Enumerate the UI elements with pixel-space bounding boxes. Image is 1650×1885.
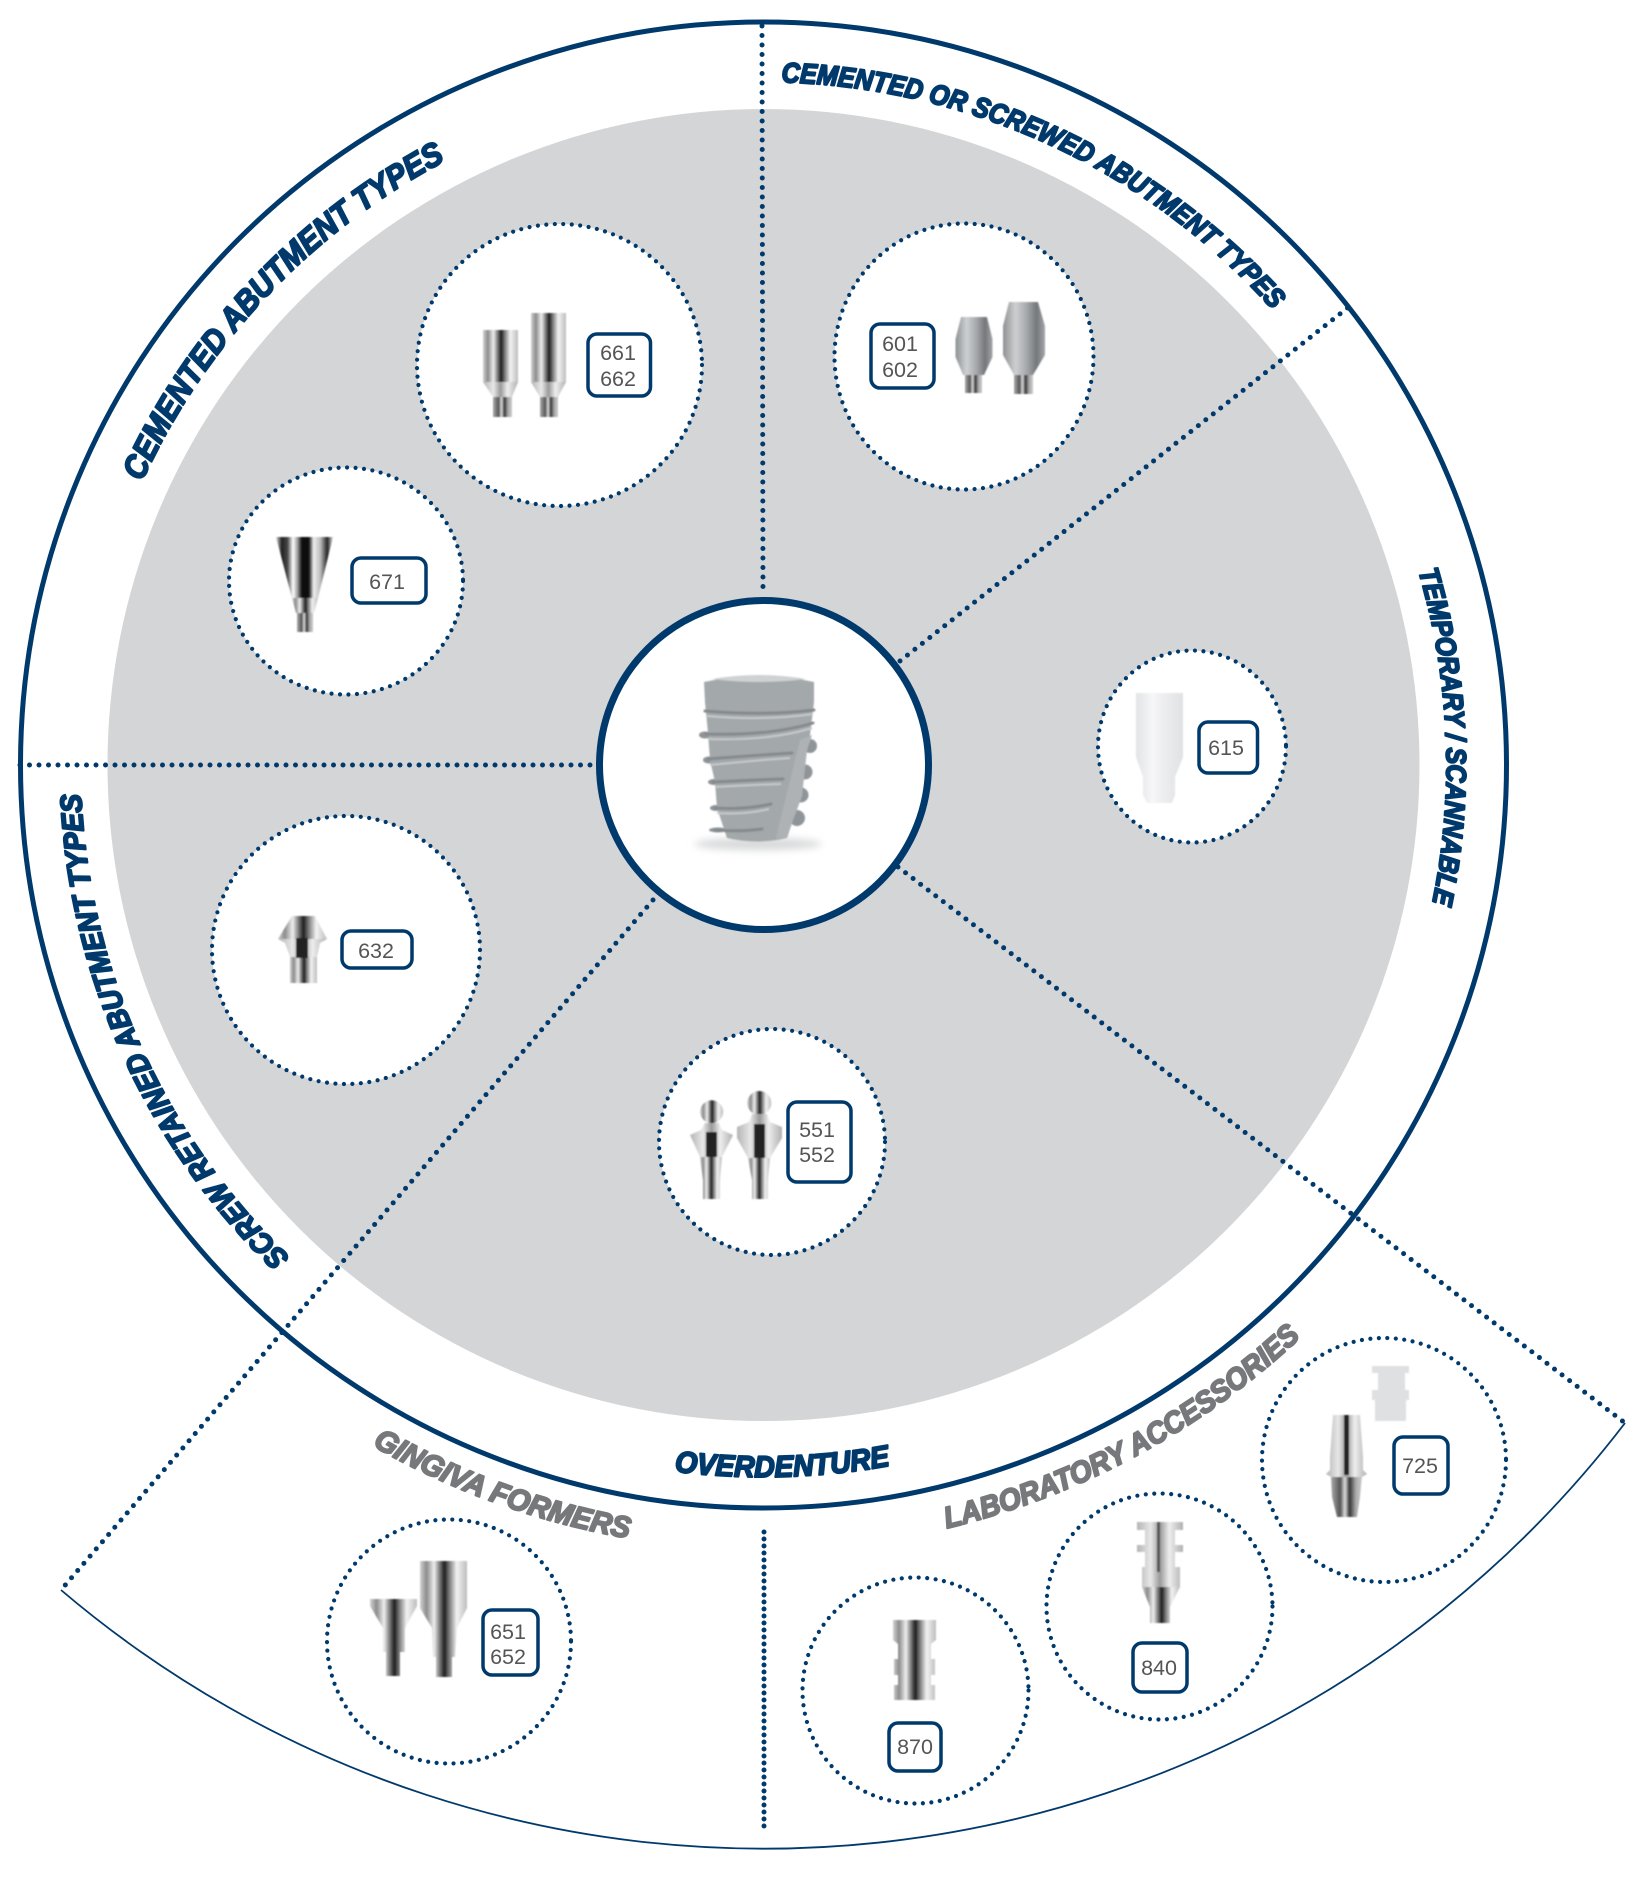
icon: abutment 661: [483, 330, 518, 417]
heading: temporary / scannable: TEMPORARY / SCANNABLE: [1418, 567, 1468, 909]
icon: plastic cap 725: [1372, 1366, 1409, 1421]
panel: 840: [1046, 1494, 1272, 1720]
icon: ball abutment 552: [737, 1091, 782, 1199]
icon: gingiva former 652: [420, 1561, 467, 1677]
heading: gingiva formers: GINGIVA FORMERS: [375, 1431, 632, 1538]
icon: ball abutment 551: [690, 1100, 733, 1199]
heading: screw retained abutment types: SCREW RETAINED ABUTMENT TYPES: [60, 794, 288, 1268]
icon: transfer 840: [1137, 1522, 1183, 1623]
code 652: 652: [490, 1645, 526, 1669]
panel: 601 / 602: [834, 224, 1094, 490]
icon: temporary abutment 615: [1136, 693, 1183, 803]
panel: 661 / 662: [417, 224, 702, 506]
heading: laboratory accessories: LABORATORY ACCESSORIES: [944, 1324, 1298, 1530]
code 870: 870: [897, 1735, 933, 1759]
code 632: 632: [358, 939, 394, 963]
panel: 725: [1262, 1338, 1506, 1582]
code 602: 602: [882, 358, 918, 382]
panel: 615: [1098, 650, 1286, 842]
icon: abutment 662: [531, 313, 566, 417]
panel: 870: [802, 1578, 1028, 1804]
label box: [889, 1723, 941, 1771]
heading: cemented or screwed abutment types: CEMENTED OR SCREWED ABUTMENT TYPES: [782, 62, 1286, 308]
heading: overdenture: OVERDENTURE: [676, 1444, 889, 1478]
icon: metal abutment 725: [1326, 1415, 1367, 1517]
outer wheel ring: [20, 22, 1506, 1508]
code 840: 840: [1141, 1656, 1177, 1680]
centre circle with implant: [600, 600, 928, 930]
icon: abutment 601: [956, 317, 992, 393]
code 551: 551: [799, 1118, 835, 1142]
label box: [871, 324, 934, 388]
label box: [1394, 1437, 1448, 1494]
label box: [342, 931, 412, 968]
icon: abutment 632: [278, 916, 327, 983]
code 662: 662: [600, 367, 636, 391]
icon: implant: [694, 675, 822, 850]
code 615: 615: [1208, 736, 1244, 760]
label box: [588, 334, 650, 396]
panel: 651 / 652: [327, 1520, 571, 1764]
code 601: 601: [882, 332, 918, 356]
label box: [1133, 1643, 1187, 1692]
panel: 632: [212, 816, 480, 1084]
label box: [1199, 722, 1258, 773]
grey inner disc: [108, 109, 1420, 1421]
outer accessory arc: [61, 1423, 1625, 1849]
code 661: 661: [600, 341, 636, 365]
icon: abutment 602: [1003, 302, 1045, 394]
label box: [483, 1610, 538, 1675]
icon: abutment 671: [276, 537, 333, 632]
label box: [352, 558, 426, 603]
code 725: 725: [1402, 1454, 1438, 1478]
code 671: 671: [369, 570, 405, 594]
code 651: 651: [490, 1620, 526, 1644]
code 552: 552: [799, 1143, 835, 1167]
icon: analog 870: [893, 1620, 936, 1700]
label box: [788, 1102, 851, 1182]
panel: 551 / 552: [659, 1029, 885, 1255]
panel: 671: [229, 468, 463, 694]
heading: cemented abutment types: CEMENTED ABUTMENT TYPES: [124, 142, 443, 479]
icon: gingiva former 651: [370, 1599, 417, 1676]
